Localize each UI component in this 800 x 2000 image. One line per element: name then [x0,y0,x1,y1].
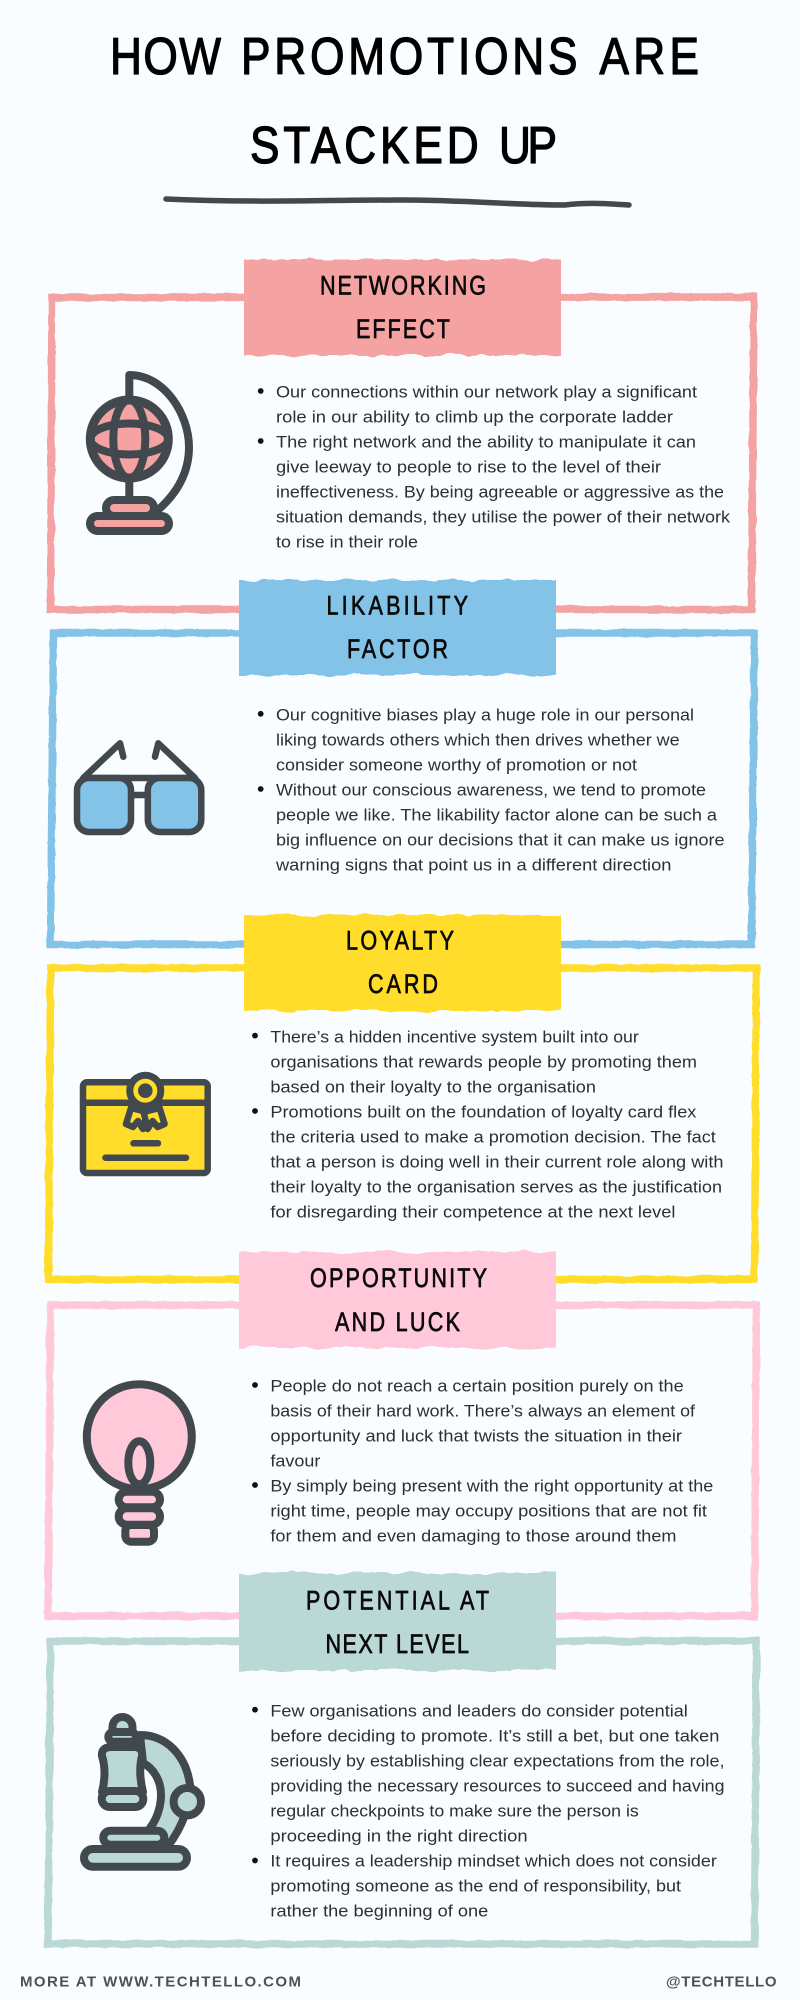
text block: loyalty card [252,1027,724,1221]
icon: glasses [77,743,201,832]
panel: likability factor [50,580,754,944]
text block: potential at next level: promoting someone as the end of responsibility, but [270,1876,681,1896]
text block: potential at next level: providing the necessary resources to succeed and having [270,1776,724,1796]
text block: potential at next level [252,1702,724,1920]
title [110,28,699,175]
text block: potential at next level: regular checkpoints to make sure the person is [270,1802,639,1820]
heading: likability factor: FACTOR [347,635,448,665]
heading: likability factor: LIKABILITY [326,591,468,621]
title: HOW [110,28,221,86]
heading: networking effect: EFFECT [356,315,450,345]
text block: potential at next level: seriously by establishing clear expectations from the role, [270,1752,724,1770]
heading: loyalty card: LOYALTY [346,926,454,956]
text block: loyalty card: for disregarding their competence at the next level [270,1202,676,1221]
heading: potential at next level: POTENTIAL AT [306,1586,489,1616]
text block: loyalty card: that a person is doing well in their current role along with [270,1152,724,1171]
title: PROMOTIONS [241,28,578,86]
title: ARE [600,28,699,86]
heading: opportunity and luck [239,1252,556,1348]
icon: microscope [84,1717,201,1867]
text block: potential at next level: before deciding to promote. It’s still a bet, but one taken [270,1726,719,1746]
text block: potential at next level: proceeding in the right direction [270,1826,528,1846]
text block: loyalty card: the criteria used to make a promotion decision. The fact [270,1127,716,1146]
icon: light bulb [87,1384,192,1542]
text block: likability factor: Without our conscious awareness, we tend to promote [276,780,706,799]
panel: opportunity and luck [48,1252,756,1616]
text block: loyalty card: their loyalty to the organisation serves as the justification [270,1177,722,1196]
text block: opportunity and luck: favour [270,1452,321,1471]
text block: networking effect: situation demands, they utilise the power of their network [276,507,731,526]
icon: certificate card [83,1075,208,1173]
heading: loyalty card [244,915,561,1011]
text block: potential at next level: It requires a leadership mindset which does not consider [270,1852,717,1870]
panel: loyalty card [48,915,756,1280]
text block: loyalty card: organisations that rewards people by promoting them [270,1052,697,1071]
text block: opportunity and luck: opportunity and luck that twists the situation in their [270,1427,682,1446]
text block: loyalty card: Promotions built on the foundation of loyalty card flex [270,1102,697,1121]
text block: networking effect: The right network and the ability to manipulate it can [276,432,696,451]
text block: networking effect [258,382,731,551]
text block: opportunity and luck: for them and even damaging to those around them [270,1527,676,1546]
text block: likability factor: Our cognitive biases play a huge role in our personal [276,705,694,724]
panel: networking effect [50,260,754,610]
text block: loyalty card: There’s a hidden incentive system built into our [270,1027,639,1046]
text block: likability factor: big influence on our decisions that it can make us ignore [276,830,724,849]
title: STACKED [250,117,479,175]
text block: networking effect: role in our ability to climb up the corporate ladder [276,407,673,426]
heading: likability factor [239,580,556,675]
text block: loyalty card: based on their loyalty to the organisation [270,1077,596,1096]
heading: networking effect: NETWORKING [320,271,486,301]
text block: likability factor: warning signs that point us in a different direction [275,855,671,874]
icon: globe [90,375,189,531]
text block: likability factor: consider someone worthy of promotion or not [276,755,637,774]
heading: opportunity and luck: AND LUCK [335,1308,461,1338]
text block: networking effect: to rise in their role [276,532,418,551]
text block: opportunity and luck: People do not reach a certain position purely on the [270,1377,684,1396]
text block: likability factor: liking towards others which then drives whether we [276,730,680,749]
heading: opportunity and luck: OPPORTUNITY [310,1264,487,1294]
text block: opportunity and luck: basis of their hard work. There’s always an element of [270,1402,695,1421]
heading: potential at next level: NEXT LEVEL [326,1630,469,1660]
text block: opportunity and luck: right time, people may occupy positions that are not fit [270,1502,707,1521]
heading: loyalty card: CARD [368,970,438,1000]
text block: networking effect: give leeway to people to rise to the level of their [276,457,661,476]
text block: opportunity and luck: By simply being present with the right opportunity at the [270,1477,713,1496]
text block: networking effect: Our connections within our network play a significant [276,382,697,401]
text block: likability factor [258,705,724,874]
text block: networking effect: ineffectiveness. By being agreeable or aggressive as the [276,482,724,501]
text block: potential at next level: rather the beginning of one [270,1902,488,1920]
footer: website: MORE AT WWW.TECHTELLO.COM [20,1974,301,1990]
footer: handle: @TECHTELLO [666,1974,777,1990]
heading: potential at next level [239,1573,556,1670]
text block: likability factor: people we like. The likability factor alone can be such a [276,805,718,824]
title: UP [499,117,557,175]
panel: potential at next level [48,1573,756,1944]
text block: potential at next level: Few organisations and leaders do consider potential [270,1702,688,1720]
heading: networking effect [244,260,561,356]
text block: opportunity and luck [252,1377,713,1546]
